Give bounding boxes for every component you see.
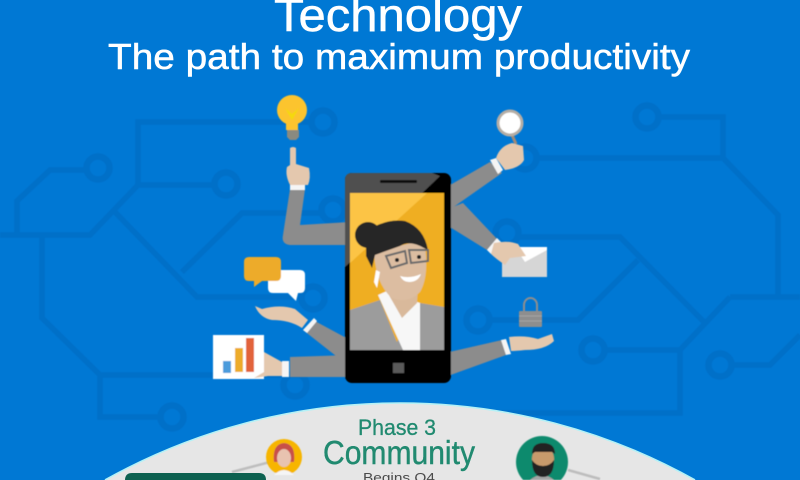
icon: light bulb [277, 95, 307, 140]
community heading: Community [323, 434, 475, 471]
panel: phase dome [105, 403, 695, 480]
hair [355, 222, 381, 248]
phase heading: Phase 3 [358, 415, 436, 440]
smile [400, 274, 421, 282]
arm: bottom left holding chart [254, 352, 350, 378]
title [108, 0, 690, 77]
arm: lower right open hand [445, 334, 554, 377]
glasses [386, 250, 428, 268]
chart card with bars [213, 335, 264, 379]
avatar: woman with red hair [266, 439, 302, 475]
arm: lower left open hand [255, 306, 350, 367]
background circuit pattern [0, 106, 800, 428]
icon: padlock [519, 298, 542, 327]
icon: magnifier [498, 111, 522, 144]
arm: upper right holding magnifier [445, 143, 524, 213]
dark green label box [125, 473, 266, 480]
connector lines [232, 462, 600, 479]
icon: envelope [502, 247, 547, 277]
illustration: phone with multi-armed woman [213, 95, 554, 383]
icon: speech bubbles [244, 257, 305, 301]
title: The path to maximum productivity [108, 36, 690, 77]
earring [374, 270, 380, 288]
face [374, 240, 426, 300]
arm: upper left pointing [283, 147, 350, 245]
phone screen with portrait [350, 193, 444, 350]
phone [345, 173, 451, 383]
arm: middle right holding envelope [445, 203, 526, 265]
avatar: bearded man [516, 436, 568, 480]
blazer and shirt [350, 300, 400, 350]
